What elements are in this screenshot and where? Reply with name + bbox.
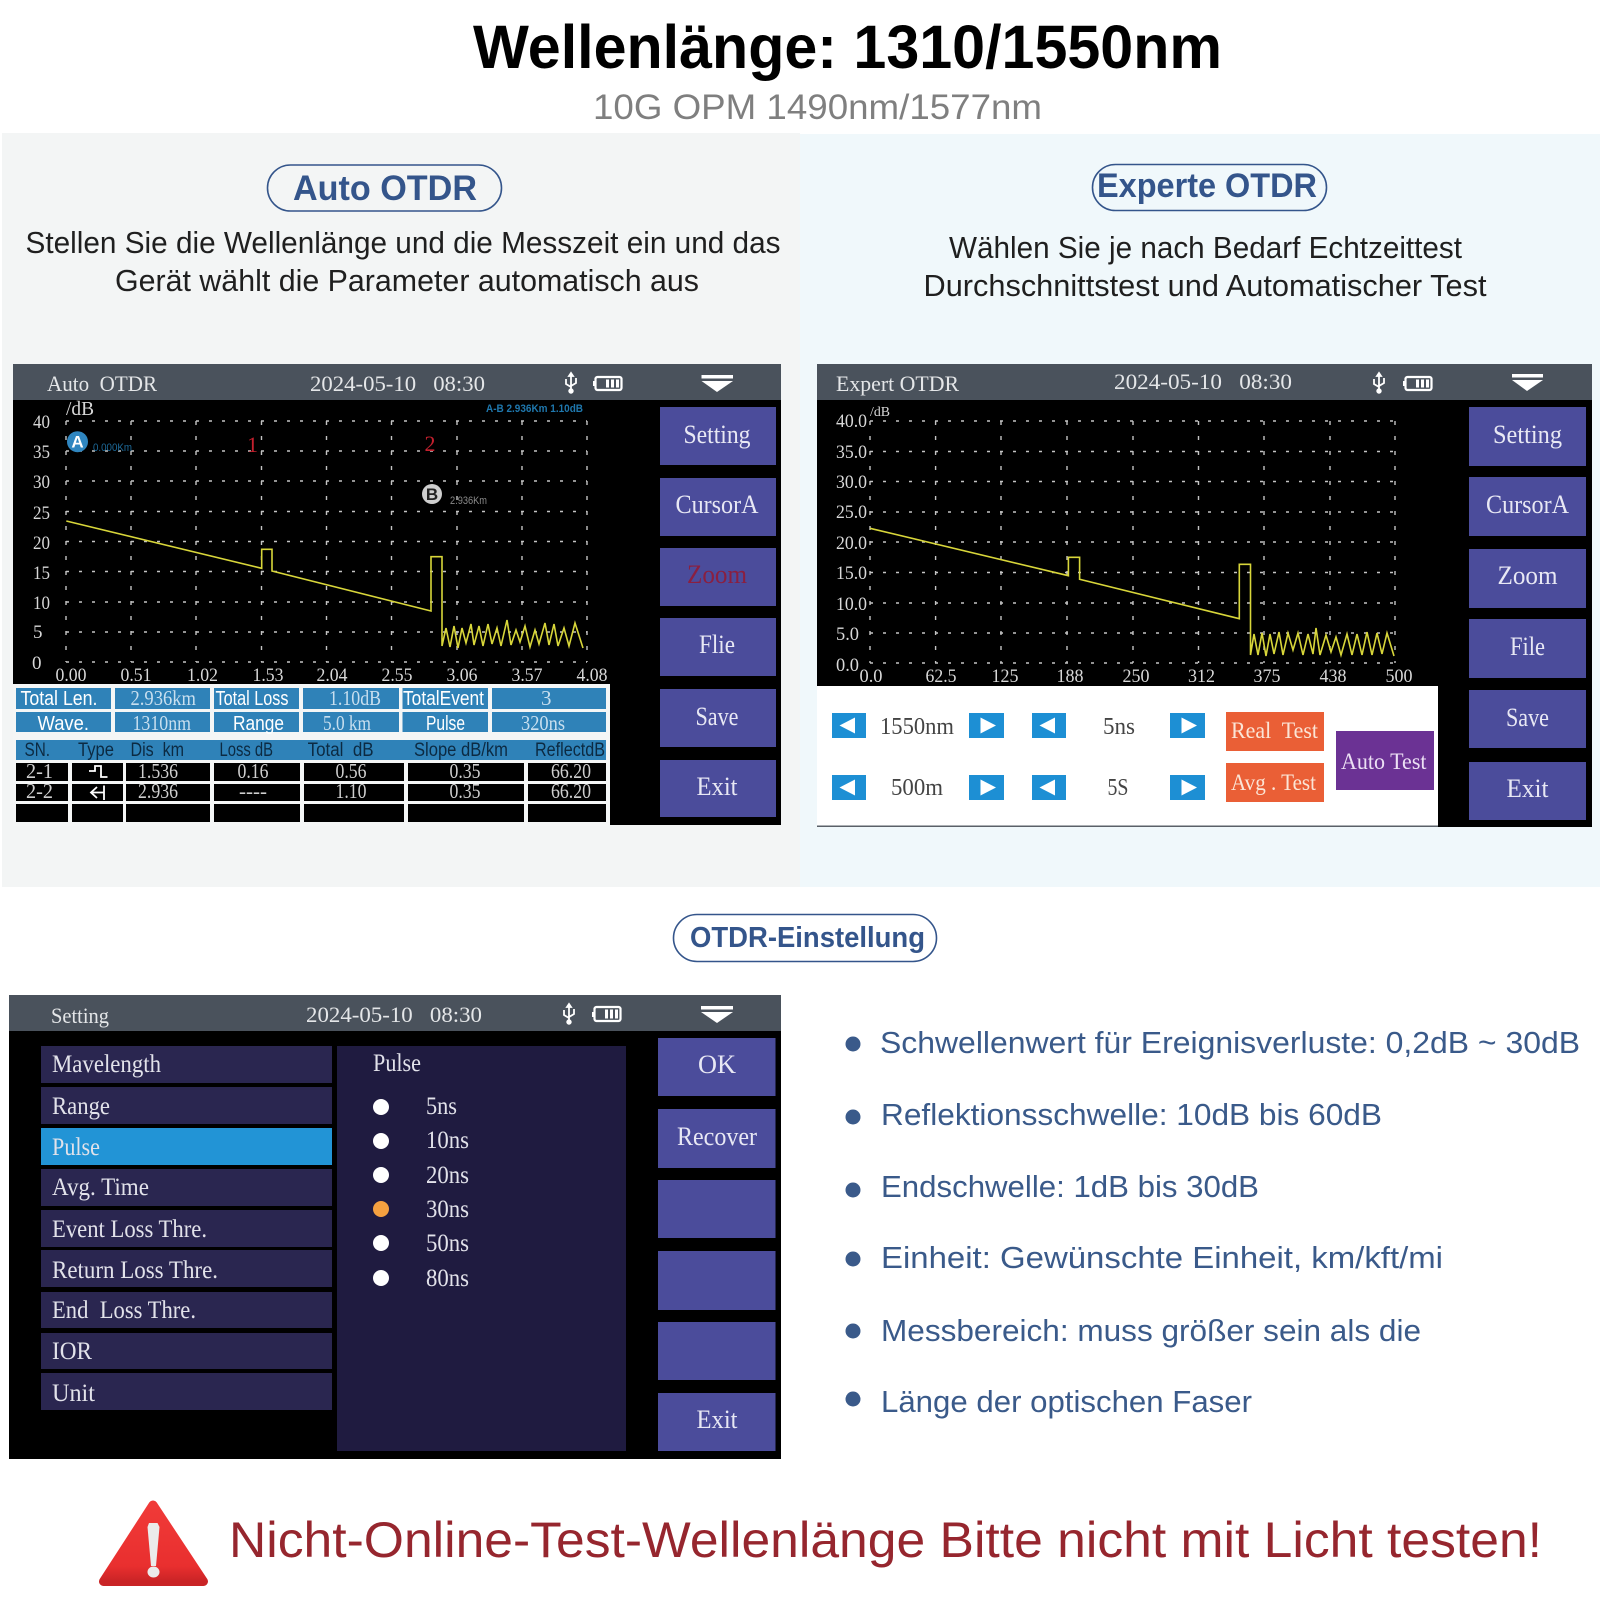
data table: Dis km xyxy=(130,740,184,761)
chart: auto OTDR trace xyxy=(32,398,608,686)
settings menu: Avg. Time xyxy=(52,1174,149,1201)
button: Auto Test xyxy=(1336,731,1434,790)
side buttons: OK xyxy=(698,1050,736,1079)
data table: 1310nm xyxy=(132,711,191,735)
event markers: 2 xyxy=(424,431,436,456)
icon: warning triangle xyxy=(104,1505,204,1582)
x axis labels: 500 xyxy=(1386,666,1412,687)
button: Real Test xyxy=(1226,712,1324,751)
x axis labels: 125 xyxy=(992,666,1018,687)
icon: usb xyxy=(566,373,576,393)
bullet list: settings ranges: Reflektionsschwelle: 10dB bis 60dB xyxy=(881,1097,1382,1132)
x axis labels: 375 xyxy=(1254,666,1280,687)
text: auto OTDR description: Gerät wählt die Parameter automatisch aus xyxy=(115,263,699,298)
cursor B xyxy=(422,484,487,507)
x axis labels xyxy=(56,665,608,686)
data table: SN. xyxy=(24,740,50,761)
heading: Experte OTDR pill: Experte OTDR xyxy=(1097,167,1317,205)
header text: Auto OTDR: 2024-05-10 08:30 xyxy=(310,371,485,396)
cursor A xyxy=(67,431,132,454)
text: expert OTDR description xyxy=(924,230,1487,303)
data table: 66.20 xyxy=(551,779,591,803)
side buttons: Save xyxy=(1506,703,1549,732)
settings menu: Unit xyxy=(52,1380,95,1407)
y axis labels: 20 xyxy=(33,533,50,554)
warning text: Nicht-Online-Test-Wellenlänge Bitte nicht mit Licht testen! xyxy=(229,1512,1542,1568)
pulse options xyxy=(337,1046,626,1451)
y axis labels: 5.0 xyxy=(836,624,859,645)
icon: battery xyxy=(1403,377,1432,390)
trace line xyxy=(66,521,583,648)
heading: Auto OTDR pill: Auto OTDR xyxy=(293,169,477,208)
bullet list: settings ranges xyxy=(846,1025,1580,1419)
data table: Type xyxy=(78,740,114,761)
settings menu: Range xyxy=(52,1093,110,1120)
data table: 0.56 xyxy=(336,759,366,783)
panel: auto OTDR background xyxy=(2,133,800,887)
settings menu: Return Loss Thre. xyxy=(52,1257,218,1284)
side buttons: Save xyxy=(696,702,738,731)
bullet list: settings ranges: Endschwelle: 1dB bis 30dB xyxy=(881,1169,1259,1204)
y axis labels: 40 xyxy=(33,412,50,433)
text: expert OTDR description: Durchschnittstest und Automatischer Test xyxy=(924,268,1487,303)
event markers xyxy=(247,431,436,457)
data table: ---- xyxy=(239,779,267,803)
data table: 3 xyxy=(541,686,552,710)
icon: dropdown xyxy=(1512,374,1543,391)
side buttons: Exit xyxy=(696,772,738,801)
pulse options: 5ns xyxy=(426,1093,457,1120)
icon: fiber end xyxy=(91,786,104,800)
side buttons xyxy=(1469,407,1586,820)
x axis labels: 2.04 xyxy=(316,665,348,686)
y axis labels: 30 xyxy=(33,472,50,493)
icon: reflective event xyxy=(89,766,108,777)
header text: Setting: 2024-05-10 08:30 xyxy=(306,1002,482,1027)
bullet list: settings ranges: Länge der optischen Faser xyxy=(881,1384,1252,1419)
title: Wellenlänge: 1310/1550nm xyxy=(473,13,1222,81)
pulse options: 80ns xyxy=(426,1265,469,1292)
bullet list: settings ranges: Schwellenwert für Ereignisverluste: 0,2dB ~ 30dB xyxy=(880,1025,1580,1060)
pulse options: 30ns xyxy=(426,1196,469,1223)
wavelength and range selectors: 500m xyxy=(891,775,943,801)
icon: dropdown xyxy=(702,375,733,392)
x axis labels: 1.02 xyxy=(187,665,218,686)
y axis labels: 35.0 xyxy=(836,442,867,463)
x axis labels: 250 xyxy=(1122,666,1150,687)
wavelength and range selectors: 1550nm xyxy=(880,714,954,740)
y axis labels: 5 xyxy=(33,622,42,643)
A-B readout: A-B 2.936Km 1.10dB xyxy=(486,403,583,415)
data table: Wave. xyxy=(38,713,89,735)
y axis labels: 25 xyxy=(33,503,50,524)
data table: 0.16 xyxy=(238,759,268,783)
data table: 320ns xyxy=(521,711,565,735)
x axis labels: 2.55 xyxy=(382,665,412,686)
x axis labels: 3.06 xyxy=(446,665,478,686)
data table: 5.0 km xyxy=(323,711,371,735)
pulse options: 10ns xyxy=(426,1127,469,1154)
data table: Pulse xyxy=(426,713,465,735)
x axis labels: 62.5 xyxy=(926,666,956,687)
y axis labels: 20.0 xyxy=(836,533,867,554)
data table: 66.20 xyxy=(551,759,591,783)
bullet list: settings ranges: Messbereich: muss größer sein als die xyxy=(881,1313,1421,1348)
y axis labels: 0.0 xyxy=(836,655,859,676)
data table: 1.10dB xyxy=(329,686,381,710)
settings menu: End Loss Thre. xyxy=(52,1297,196,1324)
heading: OTDR-Einstellung pill xyxy=(674,914,936,962)
icon: dropdown xyxy=(701,1006,733,1023)
subtitle: 10G OPM 1490nm/1577nm xyxy=(593,88,1042,127)
text: auto OTDR description xyxy=(26,225,780,298)
x axis labels: 0.00 xyxy=(56,665,86,686)
y axis labels xyxy=(32,398,94,674)
data table: Loss dB xyxy=(220,740,273,761)
data table xyxy=(13,684,610,826)
data table: 1.536 xyxy=(138,759,178,783)
cursor A: A xyxy=(71,432,84,452)
chart: expert OTDR trace xyxy=(836,405,1412,687)
bullet list: settings ranges: Einheit: Gewünschte Einheit, km/kft/mi xyxy=(881,1240,1443,1275)
side buttons: Setting xyxy=(684,420,750,449)
side buttons: CursorA xyxy=(1486,490,1569,519)
button: Avg. Test xyxy=(1226,763,1324,802)
x axis labels: 0.0 xyxy=(860,666,882,687)
settings menu: Event Loss Thre. xyxy=(52,1216,207,1243)
settings menu: Pulse xyxy=(52,1134,100,1161)
heading: OTDR-Einstellung pill: OTDR-Einstellung xyxy=(690,922,925,954)
data table: ReflectdB xyxy=(535,740,605,761)
y axis labels: 25.0 xyxy=(836,502,867,523)
y axis labels: 35 xyxy=(33,442,50,463)
y axis labels: 10 xyxy=(33,593,50,614)
pulse options: 20ns xyxy=(426,1162,469,1189)
side buttons: Setting xyxy=(1493,420,1562,449)
cursor A: 0.000Km xyxy=(93,442,132,454)
settings menu xyxy=(41,1046,332,1410)
data table: 0.35 xyxy=(450,759,480,783)
wavelength and range selectors: 5S xyxy=(1108,775,1128,801)
x axis labels: 188 xyxy=(1056,666,1084,687)
header text: Expert OTDR xyxy=(836,369,1292,396)
button: Auto Test: Auto Test xyxy=(1341,749,1427,774)
data table: 2.936 xyxy=(138,779,178,803)
x axis labels: 0.51 xyxy=(120,665,152,686)
header text: Auto OTDR xyxy=(47,371,485,396)
cursor B: 2.936Km xyxy=(450,495,487,507)
panel: Expert OTDR screen xyxy=(817,364,1592,827)
pulse options: 50ns xyxy=(426,1230,469,1257)
y axis labels: 10.0 xyxy=(836,594,867,615)
heading: Auto OTDR pill xyxy=(268,165,502,211)
side buttons xyxy=(660,407,776,817)
y axis labels: 30.0 xyxy=(836,472,867,493)
header text: Expert OTDR: 2024-05-10 08:30 xyxy=(1114,369,1292,394)
icon: battery xyxy=(593,377,622,390)
wavelength and range selectors: 5ns xyxy=(1103,714,1135,740)
side buttons: File xyxy=(1510,632,1545,661)
data table: Slope dB/km xyxy=(414,740,508,761)
data table: 0.35 xyxy=(450,779,480,803)
data table: 2-2 xyxy=(26,779,53,803)
header text: Auto OTDR: Auto OTDR xyxy=(47,371,157,396)
header text: Setting: Setting xyxy=(51,1003,109,1028)
icon: usb xyxy=(564,1004,574,1024)
side buttons: Flie xyxy=(699,630,735,659)
side buttons: Exit xyxy=(696,1405,738,1434)
y axis labels xyxy=(836,405,890,676)
panel: Setting screen xyxy=(9,995,781,1459)
settings menu: Mavelength xyxy=(52,1051,161,1078)
panel: Auto OTDR screen xyxy=(13,364,781,826)
text: auto OTDR description: Stellen Sie die Wellenlänge und die Messzeit ein und das xyxy=(26,225,780,260)
side buttons: CursorA xyxy=(676,490,759,519)
data table: 2-1 xyxy=(26,759,53,783)
header text: Setting xyxy=(51,1002,482,1028)
y axis labels: 15.0 xyxy=(836,563,867,584)
panel: expert OTDR background xyxy=(800,134,1600,887)
cursor B: B xyxy=(426,485,438,504)
y axis labels: /dB xyxy=(870,405,890,420)
control panel xyxy=(817,686,1438,827)
data table: 1.10 xyxy=(336,779,366,803)
y axis labels: 0 xyxy=(32,653,42,674)
header text: Expert OTDR: Expert OTDR xyxy=(836,371,959,396)
data table: Total Loss xyxy=(216,688,288,710)
text: expert OTDR description: Wählen Sie je nach Bedarf Echtzeittest xyxy=(949,230,1462,265)
x axis labels: 3.57 xyxy=(512,665,542,686)
x axis labels: 312 xyxy=(1188,666,1215,687)
data table: Total dB xyxy=(308,740,374,761)
data table: TotalEvent xyxy=(403,688,484,710)
icon: usb xyxy=(1374,373,1384,393)
event markers: 1 xyxy=(247,432,258,457)
data table: Total Len. xyxy=(20,688,98,710)
side buttons: Zoom xyxy=(1498,561,1558,590)
side buttons: Exit xyxy=(1506,774,1549,803)
button: Real Test: Real Test xyxy=(1231,718,1319,743)
y axis labels: /dB xyxy=(66,398,94,420)
x axis labels: 1.53 xyxy=(252,665,284,686)
side buttons: Recover xyxy=(677,1122,757,1151)
x axis labels: 4.08 xyxy=(576,665,608,686)
data table: Range xyxy=(233,713,284,735)
y axis labels: 40.0 xyxy=(836,411,867,432)
side buttons: Zoom xyxy=(687,560,747,589)
settings menu: IOR xyxy=(52,1338,92,1365)
y axis labels: 15 xyxy=(33,563,50,584)
button: Avg. Test: Avg . Test xyxy=(1231,770,1317,795)
data table: 2.936km xyxy=(130,686,196,710)
x axis labels xyxy=(860,666,1412,687)
x axis labels: 438 xyxy=(1320,666,1346,687)
trace line xyxy=(870,528,1394,656)
pulse options: Pulse xyxy=(373,1050,421,1077)
icon: battery xyxy=(592,1007,620,1021)
wavelength and range selectors xyxy=(832,713,1205,801)
side buttons xyxy=(658,1038,776,1451)
